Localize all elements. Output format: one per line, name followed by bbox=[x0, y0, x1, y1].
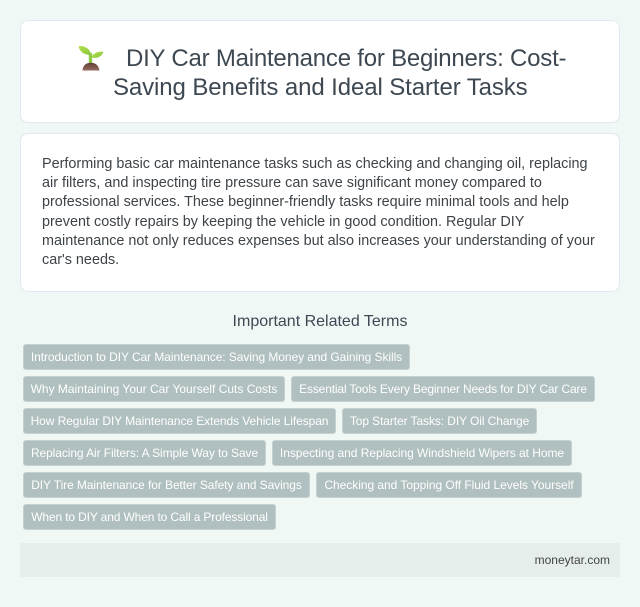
tag: Replacing Air Filters: A Simple Way to Save bbox=[31, 446, 258, 460]
text block: summary: air filters, and inspecting tire pressure can save significant money compared to bbox=[42, 175, 542, 191]
text block: summary: professional services. These beginner-friendly tasks require minimal tools and help bbox=[42, 194, 569, 210]
heading: DIY Car Maintenance for Beginners: Cost- bbox=[126, 45, 566, 72]
tag bbox=[316, 472, 582, 498]
tag: Why Maintaining Your Car Yourself Cuts Costs bbox=[31, 382, 277, 396]
tag: When to DIY and When to Call a Professional bbox=[31, 510, 268, 524]
text block: summary: car's needs. bbox=[42, 252, 119, 268]
text block: summary bbox=[42, 156, 595, 268]
tag bbox=[23, 440, 266, 466]
tag: Checking and Topping Off Fluid Levels Yourself bbox=[324, 478, 574, 492]
tag: How Regular DIY Maintenance Extends Vehicle Lifespan bbox=[31, 414, 328, 428]
tag list bbox=[23, 344, 595, 530]
text block: summary: maintenance not only reduces expenses but also increases your understanding of your bbox=[42, 233, 595, 249]
text block: summary: prevent costly repairs by keeping the vehicle in good condition. Regular DIY bbox=[42, 214, 524, 230]
footer text: moneytar.com bbox=[535, 553, 610, 567]
tag bbox=[23, 472, 310, 498]
tag: Inspecting and Replacing Windshield Wipers at Home bbox=[280, 446, 564, 460]
tag: Essential Tools Every Beginner Needs for DIY Car Care bbox=[299, 382, 587, 396]
tag bbox=[291, 376, 595, 402]
tag bbox=[23, 376, 285, 402]
tag bbox=[23, 344, 410, 370]
panel: title card: Saving Benefits and Ideal Starter Tasks bbox=[113, 74, 528, 101]
icon: seedling bbox=[78, 46, 104, 70]
tag bbox=[23, 504, 276, 530]
tag bbox=[23, 408, 336, 434]
tag: Introduction to DIY Car Maintenance: Saving Money and Gaining Skills bbox=[31, 350, 402, 364]
footer bar bbox=[20, 543, 620, 577]
tag bbox=[342, 408, 537, 434]
heading: related terms: Important Related Terms bbox=[233, 313, 407, 330]
panel: summary paragraph bbox=[20, 133, 620, 292]
tag bbox=[272, 440, 572, 466]
tag: DIY Tire Maintenance for Better Safety and Savings bbox=[31, 478, 302, 492]
panel: title card bbox=[20, 20, 620, 123]
tag: Top Starter Tasks: DIY Oil Change bbox=[350, 414, 529, 428]
text block: summary: Performing basic car maintenance tasks such as checking and changing oil, replacing bbox=[42, 156, 588, 172]
